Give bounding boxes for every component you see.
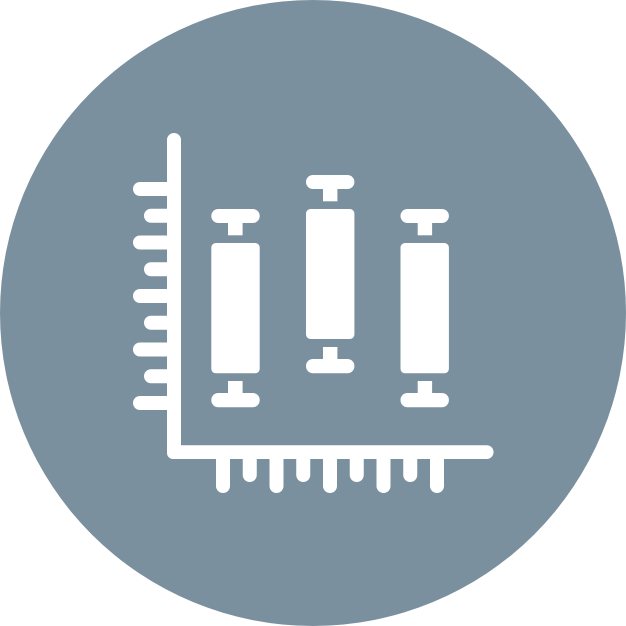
y axis ticks (133, 182, 174, 410)
candlestick: left (211, 209, 260, 407)
chart graphic (133, 133, 494, 493)
candlestick: middle (306, 175, 354, 373)
axes (167, 133, 494, 459)
candlestick: right (400, 209, 449, 407)
x axis ticks (216, 450, 444, 493)
